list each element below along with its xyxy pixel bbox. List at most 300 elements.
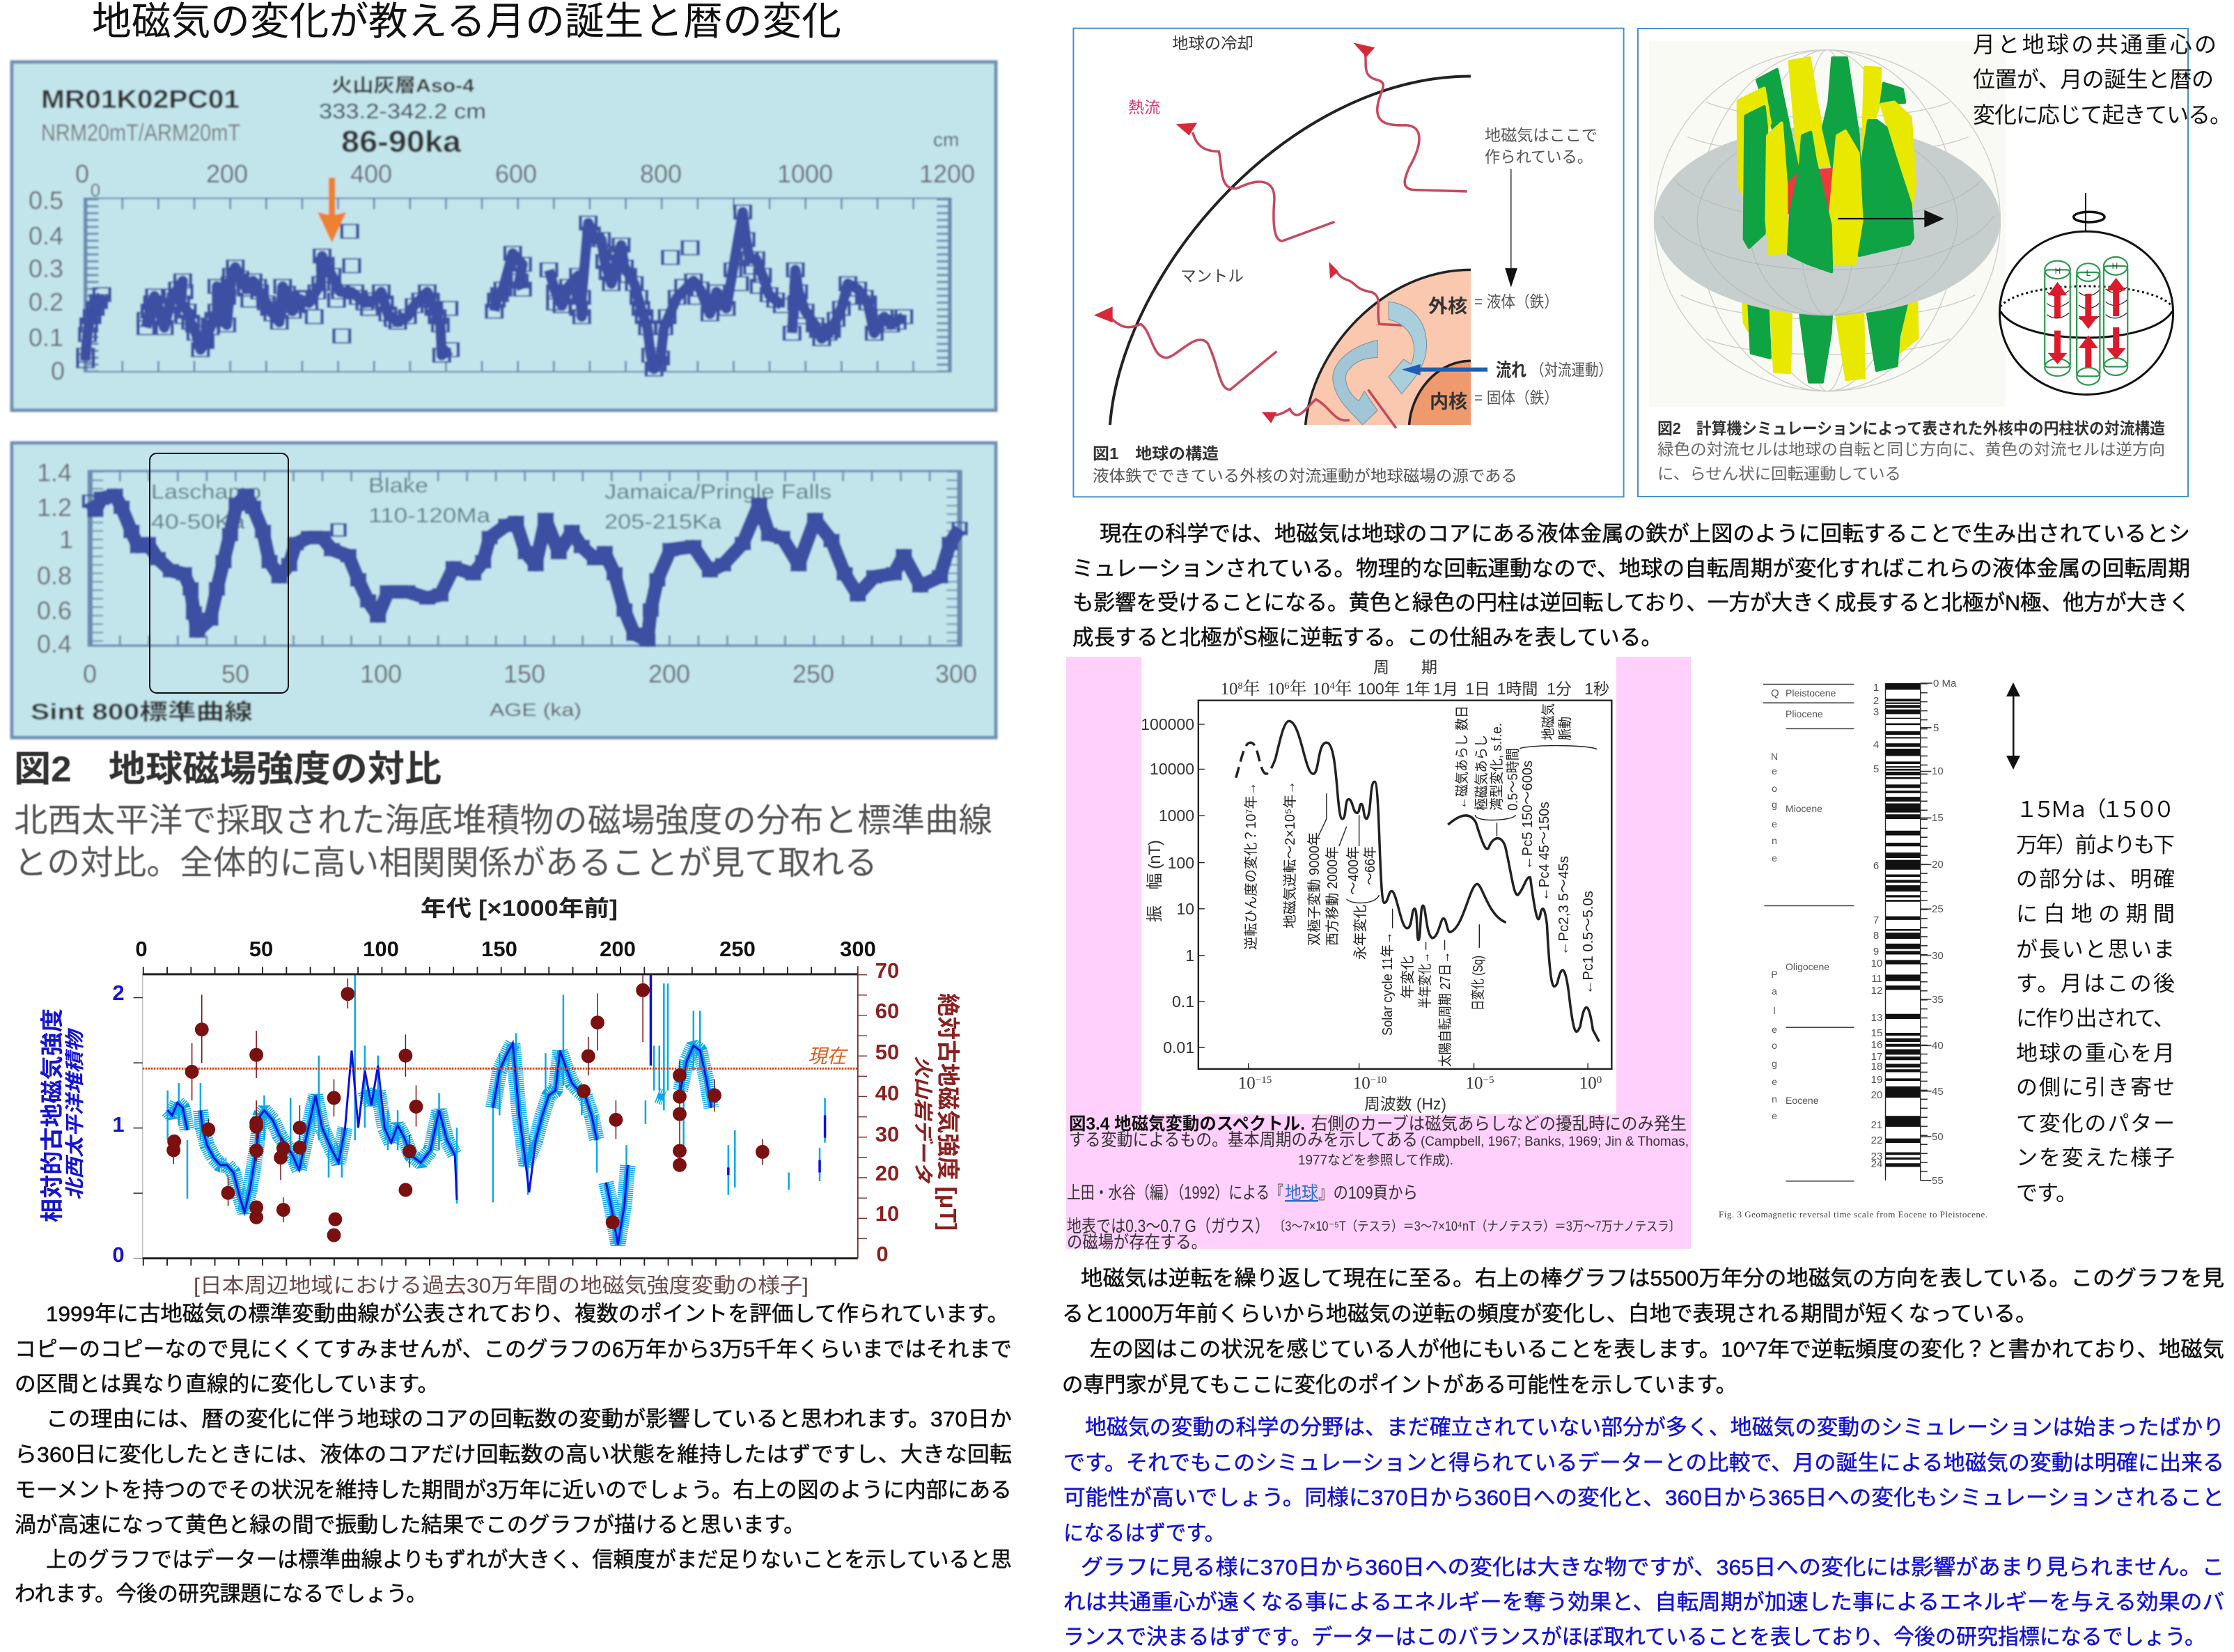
labels: figure 1: 液体鉄でできている外核の対流運動が地球磁場の源である [1093, 467, 1517, 485]
rotated period labels: ←磁気あらし 数日 [1454, 706, 1470, 809]
right age labels: 10 [1932, 765, 1944, 777]
right age labels: 15 [1932, 812, 1944, 824]
arrow: double-headed span [2006, 683, 2020, 770]
callout: side note on 15 Ma: の部分は、明確 [2016, 867, 2175, 891]
chron numbers: 10 [1871, 958, 1882, 969]
top axis labels: 100 [363, 937, 399, 961]
rotated period labels [1243, 703, 1596, 1067]
text block: right column intro: 成長すると北極がS極に逆転する。この仕組みを表している。 [1072, 625, 1662, 650]
light-blue band [168, 1043, 711, 1245]
epoch names: Pliocene [1786, 708, 1823, 719]
plot labels: −10 [1370, 1075, 1387, 1086]
caption: figure 3.4: 右側のカーブは磁気あらしなどの擾乱時にのみ発生 [1311, 1114, 1687, 1134]
right axis labels: 40 [875, 1081, 899, 1105]
caption: figure 2 [1657, 419, 2165, 483]
plot labels: 0.01 [1163, 1038, 1194, 1057]
caption: figure 3.4: (Campbell, 1967; Banks, 1969; Jin & Thomas, [1421, 1135, 1689, 1149]
right age labels: 30 [1932, 950, 1944, 962]
plot labels: 周 期 [1373, 658, 1437, 676]
epoch names: e [1772, 1024, 1777, 1035]
callout: side note on 15 Ma: 地球の重心を月 [2016, 1041, 2175, 1066]
chron numbers: 15 [1871, 1027, 1882, 1039]
chart labels: reversal events: AGE (ka) [490, 699, 581, 720]
chron numbers: 17 [1871, 1051, 1882, 1063]
text block: figure 2 caption: 北西太平洋で採取された海底堆積物の磁場強度の分布と標準曲線 [14, 802, 992, 839]
epoch names [1771, 687, 1836, 1121]
chron numbers: 19 [1871, 1074, 1882, 1086]
panel: geomagnetic spectrum figure [1066, 657, 1691, 1252]
text block: left column body: ら360日に変化したときには、液体のコアだけ回転数の高い状態を維持したはずですし、大きな回転 [15, 1442, 1012, 1467]
plot labels: −5 [1483, 1075, 1494, 1086]
rotated period labels: 極磁気あらし [1474, 735, 1490, 811]
caption: figure 3.4: 1977などを参照して作成). [1298, 1153, 1453, 1168]
chart axes labels: 0.1 [29, 323, 63, 352]
chart labels: reversal events: Blake [368, 474, 428, 497]
right age labels: 5 [1933, 722, 1939, 734]
chron numbers: 18 [1871, 1061, 1882, 1073]
chron numbers: 11 [1871, 973, 1882, 985]
chron numbers: 13 [1871, 1012, 1882, 1024]
rotated period labels: 永年変化 [1352, 905, 1368, 960]
text block: right column blue paragraphs: ランスで決まるはずです。データーはこのバランスがほぼ取れていることを表しており、今後の研究指標になるでしょう。 [1063, 1625, 2205, 1649]
plot labels [1141, 658, 1609, 1113]
text block: left column body: この理由には、暦の変化に伴う地球のコアの回転数の変動が影響していると思われます。370日か [46, 1407, 1012, 1431]
plot labels: 10 [1353, 1074, 1370, 1093]
text block: right column blue paragraphs: 地磁気の変動の科学の分野は、まだ確立されていない部分が多く、地磁気の変動のシミュレーションは始まったばかり [1085, 1415, 2224, 1440]
epoch names: Eocene [1786, 1095, 1819, 1106]
panel frame [1638, 29, 2188, 497]
rotated period labels: 〜400年 [1345, 846, 1361, 895]
heat flow waves [1111, 49, 1467, 428]
chart axes labels: 0.3 [29, 254, 63, 283]
caption: figure 3.4: 』の109頁から [1318, 1183, 1418, 1203]
plot labels: 10 [1312, 680, 1329, 699]
chart axes labels: 1000 [777, 159, 833, 188]
chart labels: core name: NRM20mT/ARM20mT [41, 120, 240, 146]
chart labels: axes: 250 [792, 660, 834, 688]
rotated period labels: 0.5〜5時間 [1505, 748, 1521, 811]
chron numbers: 24 [1871, 1158, 1882, 1170]
chart labels: axes: 0.4 [37, 630, 72, 658]
chart axes labels: 0 [75, 159, 89, 188]
rotated period labels: 湾型変化, s.f.e. [1489, 723, 1505, 811]
labels: cylinder letters: L [2086, 268, 2091, 278]
plot labels: 0 [1597, 1075, 1602, 1086]
chart axes labels: 800 [640, 159, 682, 188]
text block: right column black paragraphs: 左の図はこの状況を感じている人が他にもいることを表します。10^7年で逆転頻度の変化？と書かれており、地磁気 [1090, 1337, 2224, 1362]
diagram: earth cross section [1073, 29, 1624, 497]
epoch names: Pleistocene [1786, 687, 1836, 699]
chart axes labels: 400 [350, 159, 392, 188]
chron numbers: 2 [1873, 695, 1879, 707]
plot labels: 10 [1238, 1074, 1256, 1093]
left axis subtitle: 北西太平洋堆積物 [64, 1028, 86, 1200]
plot labels: 1秒 [1584, 680, 1609, 698]
right age labels: 0 Ma [1933, 678, 1957, 689]
plot labels: 10 [1220, 680, 1237, 699]
plot labels: 1 [1185, 946, 1194, 965]
plot labels: 1月 [1433, 680, 1458, 698]
callout: Laschamp box [150, 453, 288, 693]
plot labels: 10 [1466, 1074, 1483, 1093]
rotated period labels: 日変化 (Sq) [1470, 956, 1486, 1011]
chart axes labels [29, 159, 975, 385]
text block: right column blue paragraphs: れは共通重心が遠くなる事によるエネルギーを奪う効果と、自転周期が加速した事によるエネルギーを与える効果のバ [1063, 1590, 2224, 1614]
chart title: 年代 [×1000年前] [421, 896, 618, 921]
chart labels: axes: 1.4 [37, 458, 72, 487]
labels: cylinder letters: H [2055, 266, 2061, 276]
chart caption: [日本周辺地域における過去30万年間の地磁気強度変動の様子] [194, 1275, 809, 1298]
plot labels: 周波数 (Hz) [1364, 1095, 1446, 1113]
epoch names: e [1772, 852, 1777, 864]
plot labels: 1年 [1405, 680, 1430, 698]
rotated period labels: Solar cycle 11年→ [1380, 932, 1396, 1036]
plot labels: 0.1 [1172, 992, 1194, 1011]
top axis labels: 200 [600, 937, 636, 961]
callout: side note on 15 Ma: す。月はこの後 [2016, 972, 2175, 996]
caption: figure 3.4: 図3.4 地磁気変動のスペクトル. [1069, 1114, 1305, 1134]
chart axes labels: 200 [206, 159, 248, 188]
chron numbers: 12 [1871, 985, 1882, 997]
panel: sediment core chart MR01K02PC01 [12, 62, 996, 410]
chart labels: axes: 0.8 [37, 561, 72, 590]
rotated period labels: 逆転ひん度の変化？10⁷年→ [1243, 782, 1259, 950]
chart labels: core name: 333.2-342.2 cm [319, 99, 486, 123]
chart labels: axes: 1 [59, 525, 73, 554]
epoch names: o [1772, 783, 1777, 794]
caption: figure 3.4: 地表では0.3〜0.7 G（ガウス） [1067, 1217, 1270, 1236]
spectrum plot [1198, 701, 1611, 1069]
red arrowheads [1094, 42, 1375, 423]
chart labels: core name: 火山灰層Aso-4 [331, 75, 474, 96]
labels: figure 1: = 固体（鉄） [1474, 389, 1559, 407]
labels: figure 1: 内核 [1430, 391, 1467, 412]
label: present: 現在 [808, 1045, 849, 1067]
chart labels: axes: 200 [648, 660, 690, 688]
left axis labels [112, 981, 125, 1267]
caption: figure 3.4: の磁場が存在する。 [1067, 1233, 1207, 1252]
text block: left column body: 渦が高速になって黄色と緑の間で振動した結果でこのグラフが描けると思います。 [15, 1513, 805, 1537]
chart labels: core name: 86-90ka [341, 125, 462, 159]
chart axes labels: 0 [51, 357, 65, 385]
heading: figure 2: 図2 地球磁場強度の対比 [14, 749, 442, 790]
right axis labels: 30 [875, 1122, 899, 1146]
labels: figure 1: （対流運動） [1531, 361, 1612, 379]
chart labels: reversal events: Sint 800標準曲線 [31, 699, 253, 724]
callout: side note on 15 Ma: に作り出されて、 [2016, 1006, 2175, 1031]
right age labels: 45 [1932, 1086, 1944, 1098]
epoch names: e [1772, 818, 1777, 829]
background: pink panel [1066, 657, 1691, 1249]
panel: Sint 800 standard curve chart [12, 443, 996, 738]
epoch names: Oligocene [1786, 961, 1829, 972]
left axis labels: 0 [112, 1242, 125, 1267]
diagram: schematic sphere [1999, 193, 2173, 394]
chron numbers: 4 [1873, 739, 1879, 751]
chron numbers: 8 [1873, 930, 1879, 942]
right axis subtitle: 火山岩データ [912, 1056, 934, 1184]
epoch names: l [1773, 1005, 1776, 1016]
chron numbers: 22 [1871, 1135, 1882, 1146]
rotated period labels: ←Pc4 45〜150s [1537, 802, 1552, 901]
chart axes labels: 1200 [919, 159, 975, 188]
plot area [138, 966, 862, 1262]
plot labels: 10000 [1150, 760, 1194, 778]
right axis labels: 50 [875, 1040, 899, 1064]
chart labels: axes: 50 [221, 660, 249, 688]
panel: figure 2 convection simulation [1638, 29, 2232, 497]
chron numbers: 6 [1873, 860, 1879, 872]
text block: right column black paragraphs: の専門家が見てもここに変化のポイントがある可能性を示しています。 [1062, 1373, 1737, 1397]
caption: figure 3.4: 〔3〜7×10⁻⁵T（テスラ）＝3〜7×10⁴nT（ナノテスラ）＝3万〜7万ナノテスラ〕 [1274, 1219, 1680, 1234]
left axis labels: 2 [112, 981, 125, 1005]
rotated period labels: 双極子変動 9000年 [1306, 832, 1322, 946]
text block: left column body: の区間とは異なり直線的に変化しています。 [15, 1372, 439, 1396]
plot labels: 年 [1334, 679, 1352, 699]
text block: right column intro: 現在の科学では、地磁気は地球のコアにある液体金属の鉄が上図のように回転することで生み出されているとシ [1100, 522, 2190, 546]
chron numbers: 9 [1873, 946, 1879, 958]
top axis labels: 0 [135, 937, 148, 961]
volcanic rock data points [173, 990, 763, 1236]
callout: side note on 15 Ma: ンを変えた様子 [2016, 1146, 2175, 1170]
caption: figure 3.4 [1067, 1114, 1689, 1252]
callout: side note on 15 Ma: に白地の期間 [2016, 902, 2175, 926]
epoch names: P [1771, 969, 1778, 980]
plot labels: 年 [1289, 679, 1307, 699]
right age labels: 25 [1932, 903, 1944, 915]
rotated period labels: 〜66年 [1362, 846, 1378, 885]
rotated period labels: 地磁気逆転〜2×10⁵年→ [1282, 781, 1298, 928]
chart axes labels: 0 [91, 180, 100, 201]
callout: side note on 15 Ma: が長いと思いま [2016, 937, 2175, 962]
callout: side note on 15 Ma: の側に引き寄せ [2016, 1075, 2175, 1100]
dark-blue centre line [168, 975, 825, 1245]
text block: left column body: 上のグラフではデーターは標準曲線よりもずれが大きく、信頼度がまだ足りないことを示していると思 [46, 1548, 1012, 1572]
chron numbers: 20 [1871, 1089, 1882, 1101]
plot labels: 10 [1176, 900, 1194, 918]
arrow: flow pointer [1419, 368, 1487, 372]
labels: figure 1: 流れ [1496, 360, 1526, 381]
upper columns [1738, 58, 1915, 272]
text block: right column black paragraphs [1062, 1266, 2224, 1397]
labels: figure 1: 地球の冷却 [1172, 34, 1253, 52]
right age labels: 40 [1932, 1040, 1944, 1052]
arrow: field source pointer [1510, 169, 1512, 270]
right axis labels: 0 [876, 1242, 889, 1266]
epoch names: o [1772, 1040, 1777, 1051]
left axis labels: 1 [112, 1112, 125, 1137]
epoch names: g [1772, 799, 1777, 810]
plot labels: 100 [1168, 854, 1194, 872]
plot labels: 10 [1579, 1074, 1597, 1093]
equatorial plane [1655, 126, 2000, 315]
plot labels: 1日 [1465, 680, 1490, 698]
chron numbers [1871, 682, 1882, 1170]
top axis labels: 50 [249, 937, 273, 961]
right age labels [1932, 678, 1957, 1187]
error bars [173, 975, 763, 1222]
title: 地磁気の変化が教える月の誕生と暦の変化 [92, 0, 841, 43]
callout: side note on 15 Ma [2016, 797, 2175, 1206]
epoch names: a [1772, 985, 1777, 997]
epoch names: g [1772, 1058, 1777, 1069]
epoch names: n [1772, 1093, 1777, 1105]
callout: barycenter note [1973, 32, 2232, 127]
text block: left column body: モーメントを持つのでその状況を維持した期間が3万年に近いのでしょう。右上の図のように内部にある [15, 1478, 1012, 1502]
rotated period labels: 脈動 [1557, 717, 1573, 740]
frame lines [143, 974, 858, 1259]
labels: figure 1: 地磁気はここで [1485, 126, 1598, 144]
chron numbers: 1 [1873, 682, 1879, 694]
plot labels: 100年 [1357, 680, 1400, 698]
epoch divider lines [1763, 684, 1854, 1181]
right axis labels: 60 [875, 999, 899, 1023]
plot labels: 4 [1329, 681, 1334, 692]
text block: left column body: コピーのコピーなので見にくくてすみませんが、このグラフの6万年から3万5千年くらいまではそれまで [15, 1337, 1012, 1362]
chart labels: axes: 1.2 [37, 493, 72, 522]
right age labels: 20 [1932, 859, 1944, 871]
chart labels: axes: 150 [503, 660, 545, 688]
epoch names: Q [1771, 687, 1779, 699]
caption: figure 3.4: する変動によるもの。基本周期のみを示してある [1069, 1130, 1418, 1150]
polarity bars [1763, 683, 1932, 1181]
panel: figure 1 earth structure [1073, 29, 1624, 497]
caption: figure 2: 図2 計算機シミュレーションによって表された外核中の円柱状の対流構造 [1657, 419, 2165, 437]
chart labels: reversal events: 40-50Ka [151, 511, 245, 533]
plot labels: 10 [1267, 680, 1284, 699]
text block: right column black paragraphs: 地磁気は逆転を繰り返して現在に至る。右上の棒グラフは5500万年分の地磁気の方向を表している。このグラフを見 [1081, 1266, 2224, 1291]
callout: side note on 15 Ma: 万年）前よりも下 [2016, 833, 2175, 857]
plot labels: 年 [1242, 679, 1260, 699]
labels: figure 1: 外核 [1428, 296, 1467, 317]
callout: side note on 15 Ma: １５Ｍａ（１５００ [2016, 797, 2175, 822]
right axis title: 絶対古地磁気強度 [μT] [935, 993, 961, 1231]
epoch names: N [1771, 751, 1778, 762]
right axis labels: 70 [875, 958, 899, 983]
caption: figure 3.4: 上田・水谷（編）（1992）による『 [1067, 1183, 1283, 1203]
chart axes labels: 0.5 [29, 186, 63, 215]
caption: figure 3.4: 地球 [1285, 1183, 1318, 1203]
rotated period labels: 太陽自転周期 27日→ [1437, 951, 1453, 1067]
callout: barycenter note: 変化に応じて起きている。 [1973, 102, 2232, 127]
caption: figure 2: 緑色の対流セルは地球の自転と同じ方向に、黄色の対流セルは逆方向 [1657, 440, 2165, 458]
left axis title: 相対的古地磁気強度 [39, 1008, 65, 1222]
diagram: simulated columns [1649, 40, 2006, 407]
dotted line: present field [143, 1068, 858, 1070]
text block: right column blue paragraphs: になるはずです。 [1063, 1521, 1225, 1545]
chart labels: reversal events: 205-215Ka [604, 511, 721, 533]
epoch names: n [1772, 835, 1777, 846]
plot labels: 1000 [1159, 806, 1194, 825]
chart labels: reversal events: Laschamp [151, 481, 261, 504]
chart labels: axes [37, 458, 977, 688]
epoch names: e [1772, 765, 1777, 777]
top axis labels: 300 [840, 937, 876, 961]
rotated period labels: ←Pc5 150〜600s [1520, 761, 1536, 870]
chron numbers: 7 [1873, 914, 1879, 926]
plot labels: 6 [1284, 681, 1289, 692]
right axis labels: 10 [875, 1201, 899, 1226]
scatter plot [90, 471, 960, 646]
plot labels: 100000 [1141, 715, 1194, 733]
arrow: orange marker at Aso-4 [318, 178, 346, 243]
rotated period labels: 地磁気 [1540, 703, 1556, 740]
text block: right column black paragraphs: ると1000万年前くらいから地磁気の逆転の頻度が変化し、白地で表現される期間が短くなっている。 [1062, 1302, 2037, 1326]
chart labels: core name: MR01K02PC01 [41, 85, 240, 114]
labels: figure 1 [1093, 34, 1612, 485]
labels: cylinder letters [2055, 261, 2118, 278]
labels: cylinder letters: H [2112, 261, 2118, 271]
epoch names: e [1772, 1110, 1777, 1121]
plot labels: 8 [1237, 681, 1242, 692]
chart: paleointensity around Japan [39, 896, 961, 1298]
chart axes labels: 600 [495, 159, 537, 188]
right age labels: 35 [1932, 994, 1944, 1006]
rotated period labels: 年変化 [1400, 956, 1416, 999]
text block: right column blue paragraphs [1063, 1415, 2224, 1649]
chron numbers: 16 [1871, 1039, 1882, 1051]
chart labels: core name: cm [933, 129, 959, 150]
chron numbers: 5 [1873, 763, 1879, 775]
callout: side note on 15 Ma: て変化のパター [2016, 1112, 2175, 1136]
plot labels: −15 [1256, 1075, 1272, 1086]
text block: figure 2 caption: との対比。全体的に高い相関関係があることが見て取れる [14, 845, 877, 882]
labels: figure 1: 図1 地球の構造 [1093, 444, 1219, 462]
rotated period labels: 西方移動 2000年 [1325, 846, 1341, 946]
figure caption: Fig. 3 Geomagnetic reversal time scale from Eocene to Pleistocene. [1719, 1209, 1987, 1219]
plot labels: 1分 [1547, 680, 1572, 698]
text block: right column intro [1072, 522, 2190, 650]
scatter plot [86, 178, 950, 372]
right axis labels [875, 958, 899, 1266]
chron numbers: 21 [1871, 1119, 1882, 1131]
labels: figure 1: マントル [1180, 267, 1244, 285]
chron numbers: 23 [1871, 1151, 1882, 1162]
lower columns [1743, 297, 1917, 382]
callout: barycenter note: 位置が、月の誕生と暦の [1973, 67, 2214, 92]
text block: left column body: われます。今後の研究課題になるでしょう。 [15, 1582, 427, 1606]
rotated period labels: ←Pc1 0.5〜5.0s [1581, 891, 1596, 995]
chart labels: core name [41, 75, 959, 159]
text block: right column blue paragraphs: です。それでもこのシミュレーションと得られているデーターとの比較で、月の誕生による地磁気の変動は明確に出来る [1063, 1451, 2224, 1475]
text block: figure 2 caption [14, 802, 992, 882]
top axis labels [135, 937, 876, 961]
rotated period labels: ←Pc2,3 5〜45s [1556, 856, 1572, 956]
plot labels: 1時間 [1497, 680, 1538, 698]
right age labels: 55 [1932, 1175, 1944, 1187]
chart labels: axes: 0 [83, 660, 97, 688]
text block: right column blue paragraphs: グラフに見る様に370日から360日への変化は大きな物ですが、365日への変化には影響があまり見られません。こ [1081, 1555, 2224, 1580]
text block: left column body: 1999年に古地磁気の標準変動曲線が公表されており、複数のポイントを評価して作られています。 [46, 1302, 1009, 1326]
labels: figure 1: 熱流 [1128, 98, 1160, 116]
thin blue spikes [168, 975, 825, 1205]
right axis labels: 20 [875, 1161, 899, 1185]
callout: side note on 15 Ma: です。 [2016, 1181, 2077, 1206]
chart axes labels: 0.2 [29, 288, 63, 316]
chart labels: axes: 100 [360, 660, 402, 688]
text block: right column blue paragraphs: 可能性が高いでしょう。同様に370日から360日への変化と、360日から365日への変化もシミュレーションされること [1063, 1486, 2224, 1510]
chron numbers: 3 [1873, 706, 1879, 718]
chart labels: reversal events: 110-120Ma [368, 504, 490, 527]
text block: left column body [15, 1302, 1012, 1606]
chart labels: reversal events: Jamaica/Pringle Falls [604, 481, 831, 504]
chart labels: reversal events [31, 474, 831, 724]
top axis labels: 150 [481, 937, 517, 961]
convection arrows [1389, 302, 1427, 394]
text block: right column intro: も影響を受けることになる。黄色と緑色の円柱は逆回転しており、一方が大きく成長すると北極がN極、他方が大きく [1072, 591, 2190, 615]
chart labels: axes: 0.6 [37, 596, 72, 625]
caption: figure 2: に、らせん状に回転運動している [1657, 465, 1901, 483]
